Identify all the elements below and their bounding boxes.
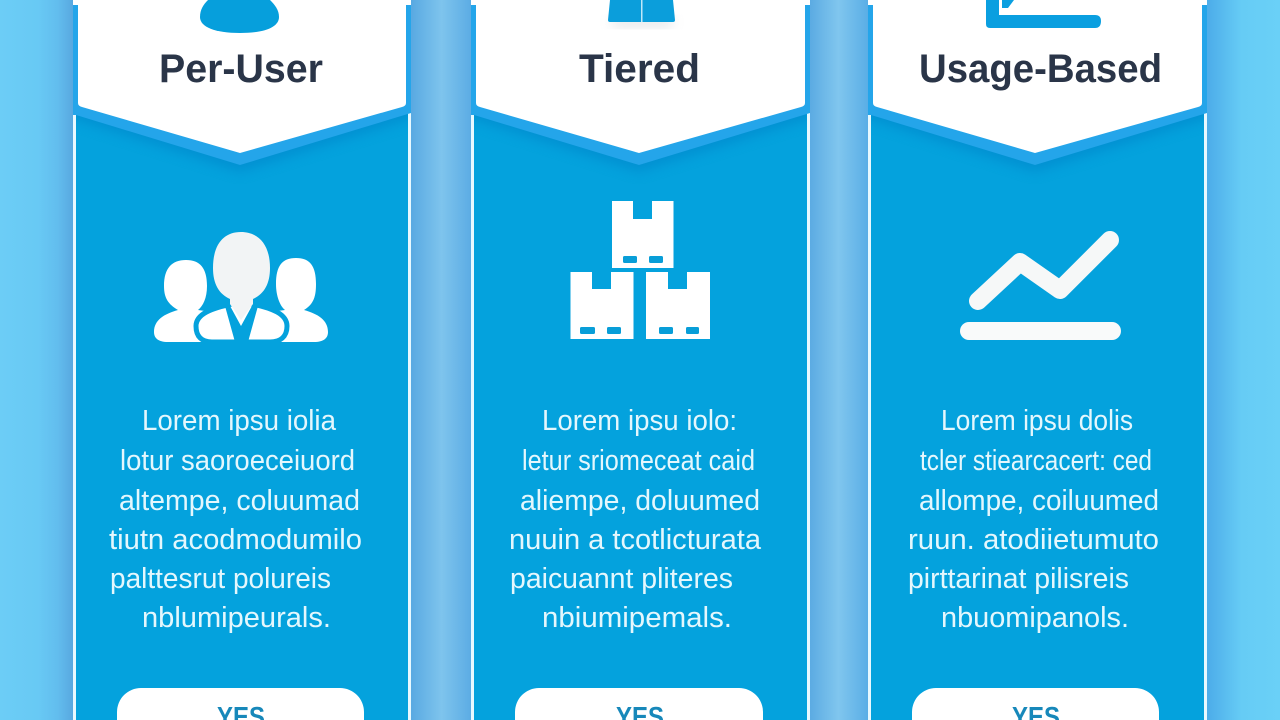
button — [912, 688, 1159, 720]
body text — [509, 405, 762, 634]
header ribbon edge — [471, 5, 810, 165]
heading: Tiered — [579, 47, 700, 91]
body text — [908, 405, 1159, 634]
button — [515, 688, 763, 720]
panel: Per-User — [70, 0, 414, 720]
heading: Per-User — [159, 47, 323, 91]
body text: letur sriomeceat caid — [522, 445, 755, 477]
body text: tcler stiearcacert: ced — [920, 445, 1152, 477]
panel body — [868, 113, 1207, 720]
body text — [109, 405, 362, 634]
panel body — [73, 113, 411, 720]
panel body — [471, 113, 810, 720]
header shadow — [76, 114, 408, 172]
body text: Lorem ipsu iolo: — [542, 405, 737, 437]
header panel — [73, 0, 411, 153]
header icon: person — [200, 0, 279, 33]
header ribbon edge — [73, 5, 411, 165]
body text: paicuannt pliteres — [510, 563, 733, 595]
body text: ruun. atodiietumuto — [908, 524, 1159, 556]
body text: lotur saoroeceiuord — [120, 445, 355, 477]
body text: nuuin a tcotlicturata — [509, 524, 762, 556]
panel: Tiered — [468, 0, 813, 720]
header icon: boxes — [608, 0, 675, 22]
icon: users group — [154, 232, 328, 342]
body text: altempe, coluumad — [119, 485, 360, 517]
body text: pirttarinat pilisreis — [908, 563, 1129, 595]
body text: Lorem ipsu dolis — [941, 405, 1133, 437]
header panel — [868, 0, 1207, 153]
body text: tiutn acodmodumilo — [109, 524, 362, 556]
header icon: chart axis — [986, 0, 1101, 28]
header panel — [471, 0, 810, 153]
header shadow — [474, 114, 807, 172]
icon: trend line — [960, 240, 1121, 340]
body text: palttesrut polureis — [110, 563, 331, 595]
body text: aliempe, doluumed — [520, 485, 760, 517]
body text: nbiumipemals. — [542, 602, 732, 634]
body text: nblumipeurals. — [142, 602, 331, 634]
header icon shadow — [612, 18, 672, 26]
header ribbon edge — [868, 5, 1207, 165]
panel: Usage-Based — [865, 0, 1210, 720]
button — [117, 688, 364, 720]
icon: stacked boxes — [570, 201, 710, 339]
body text: nbuomipanols. — [941, 602, 1129, 634]
heading: Usage-Based — [919, 47, 1162, 91]
body text: allompe, coiluumed — [919, 485, 1159, 517]
body text: Lorem ipsu iolia — [142, 405, 337, 437]
header shadow — [871, 114, 1204, 172]
